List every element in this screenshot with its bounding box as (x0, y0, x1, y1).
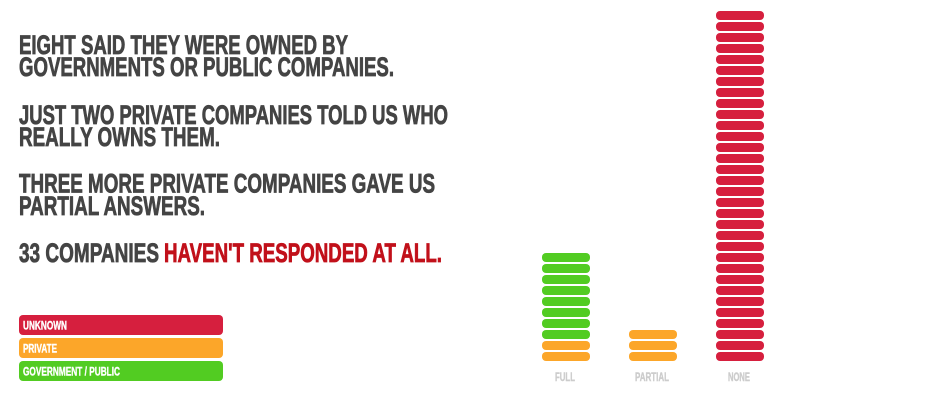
legend item: private (19, 338, 223, 358)
statement: partial answers: PARTIAL ANSWERS. (19, 191, 205, 221)
legend (19, 315, 223, 381)
statement: no response (19, 238, 442, 268)
text block: findings (19, 30, 448, 268)
legend item: government / public: GOVERNMENT / PUBLIC (23, 364, 120, 378)
column: none: NONE (728, 370, 750, 384)
statement: private owners disclosed: JUST TWO PRIVATE COMPANIES TOLD US WHO (19, 100, 448, 130)
statement: no response: 33 COMPANIES (19, 238, 159, 268)
statement: partial answers: THREE MORE PRIVATE COMPANIES GAVE US (19, 168, 435, 198)
column: full (542, 253, 590, 384)
statement: no response: HAVEN'T RESPONDED AT ALL. (164, 238, 442, 268)
column: partial (629, 330, 677, 384)
legend item: unknown (19, 315, 223, 335)
column: none (716, 11, 764, 384)
statement: partial answers (19, 168, 435, 221)
statement: government or public owners: GOVERNMENTS OR PUBLIC COMPANIES. (19, 52, 394, 82)
legend item: government / public (19, 361, 223, 381)
statement: private owners disclosed: REALLY OWNS THEM. (19, 122, 220, 152)
statement: government or public owners: EIGHT SAID THEY WERE OWNED BY (19, 30, 348, 60)
legend item: private: PRIVATE (23, 342, 57, 356)
statement: government or public owners (19, 30, 394, 82)
column: partial: PARTIAL (635, 370, 669, 384)
legend item: unknown: UNKNOWN (23, 318, 67, 332)
column: full: FULL (555, 370, 575, 384)
statement: private owners disclosed (19, 100, 448, 152)
bar chart: responses (542, 11, 764, 384)
